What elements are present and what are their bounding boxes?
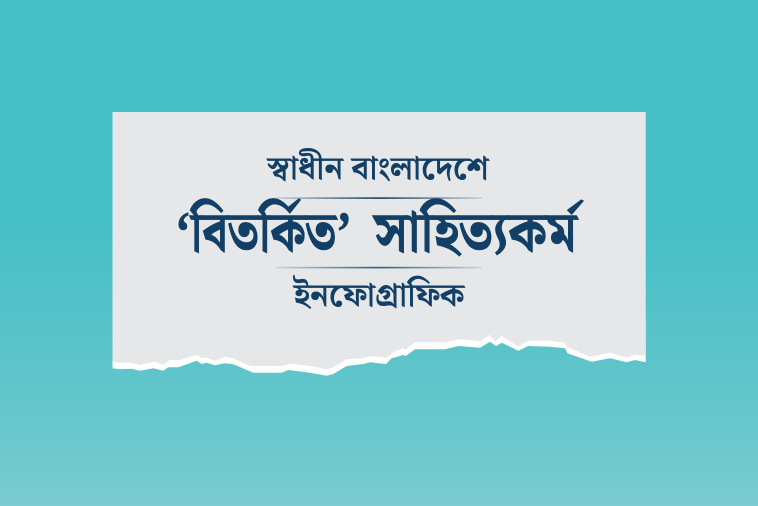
main title: ‘বিতর্কিত’ সাহিত্যকর্ম: ‘বিতর্কিত’ [175,197,352,264]
subtitle: ইনফোগ্রাফিক: ইনফোগ্রাফিক [292,274,466,314]
main title: ‘বিতর্কিত’ সাহিত্যকর্ম: সাহিত্যকর্ম [372,197,584,264]
grey paper sheet [112,112,646,369]
torn white edge [112,320,646,376]
upper divider rule [276,197,482,199]
lower divider rule [276,267,482,268]
heading line: স্বাধীন বাংলাদেশে: স্বাধীন বাংলাদেশে [265,148,491,187]
main title: ‘বিতর্কিত’ সাহিত্যকর্ম [175,197,584,264]
